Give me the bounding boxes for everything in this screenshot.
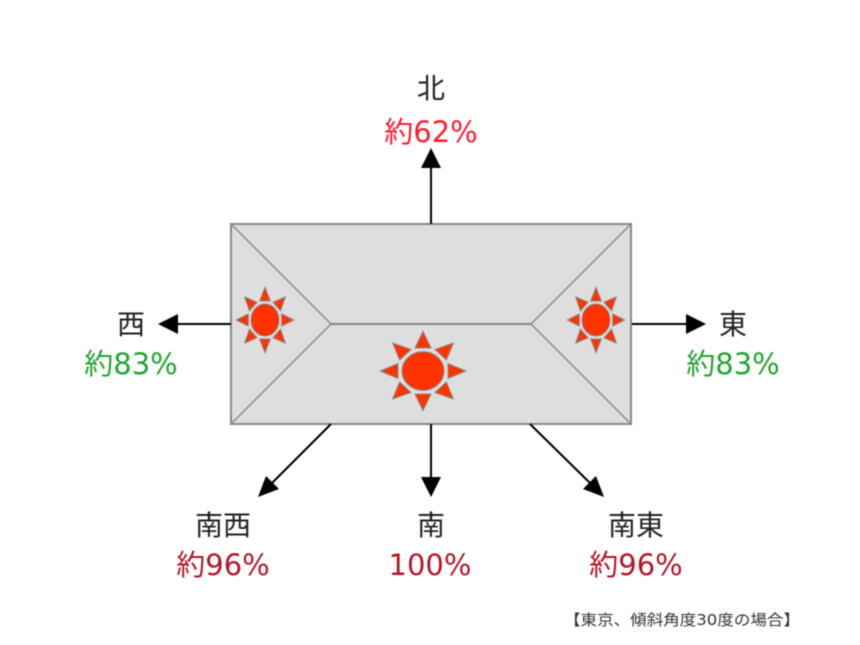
- icon: west sun: [236, 287, 294, 353]
- icon: east sun: [567, 287, 625, 353]
- label: southwest: 約96%: [176, 548, 270, 582]
- label: west: 西: [117, 308, 145, 341]
- label: south: 100%: [389, 548, 471, 582]
- label: west: [84, 308, 178, 381]
- icon: south sun: [380, 331, 466, 411]
- label: southwest: [176, 509, 270, 582]
- label: southwest: 南西: [195, 509, 251, 542]
- footnote: 【東京、傾斜角度30度の場合】: [564, 611, 800, 629]
- panel: roof plan: [231, 224, 631, 424]
- arrow: east: [632, 314, 706, 334]
- label: southeast: [589, 509, 683, 582]
- arrow: west: [158, 314, 231, 334]
- label: south: 南: [417, 509, 445, 542]
- arrow: north: [421, 148, 441, 224]
- arrow: southwest: [258, 424, 331, 497]
- label: east: 約83%: [686, 347, 780, 381]
- label: southeast: 南東: [608, 509, 664, 542]
- label: west: 約83%: [84, 347, 178, 381]
- label: north: 約62%: [384, 115, 478, 149]
- label: north: [384, 72, 478, 149]
- label: east: [686, 308, 780, 381]
- arrow: southeast: [530, 424, 604, 497]
- label: north: 北: [417, 72, 445, 105]
- label: southeast: 約96%: [589, 548, 683, 582]
- label: east: 東: [719, 308, 747, 341]
- label: south: [389, 509, 471, 582]
- arrow: south: [421, 424, 441, 497]
